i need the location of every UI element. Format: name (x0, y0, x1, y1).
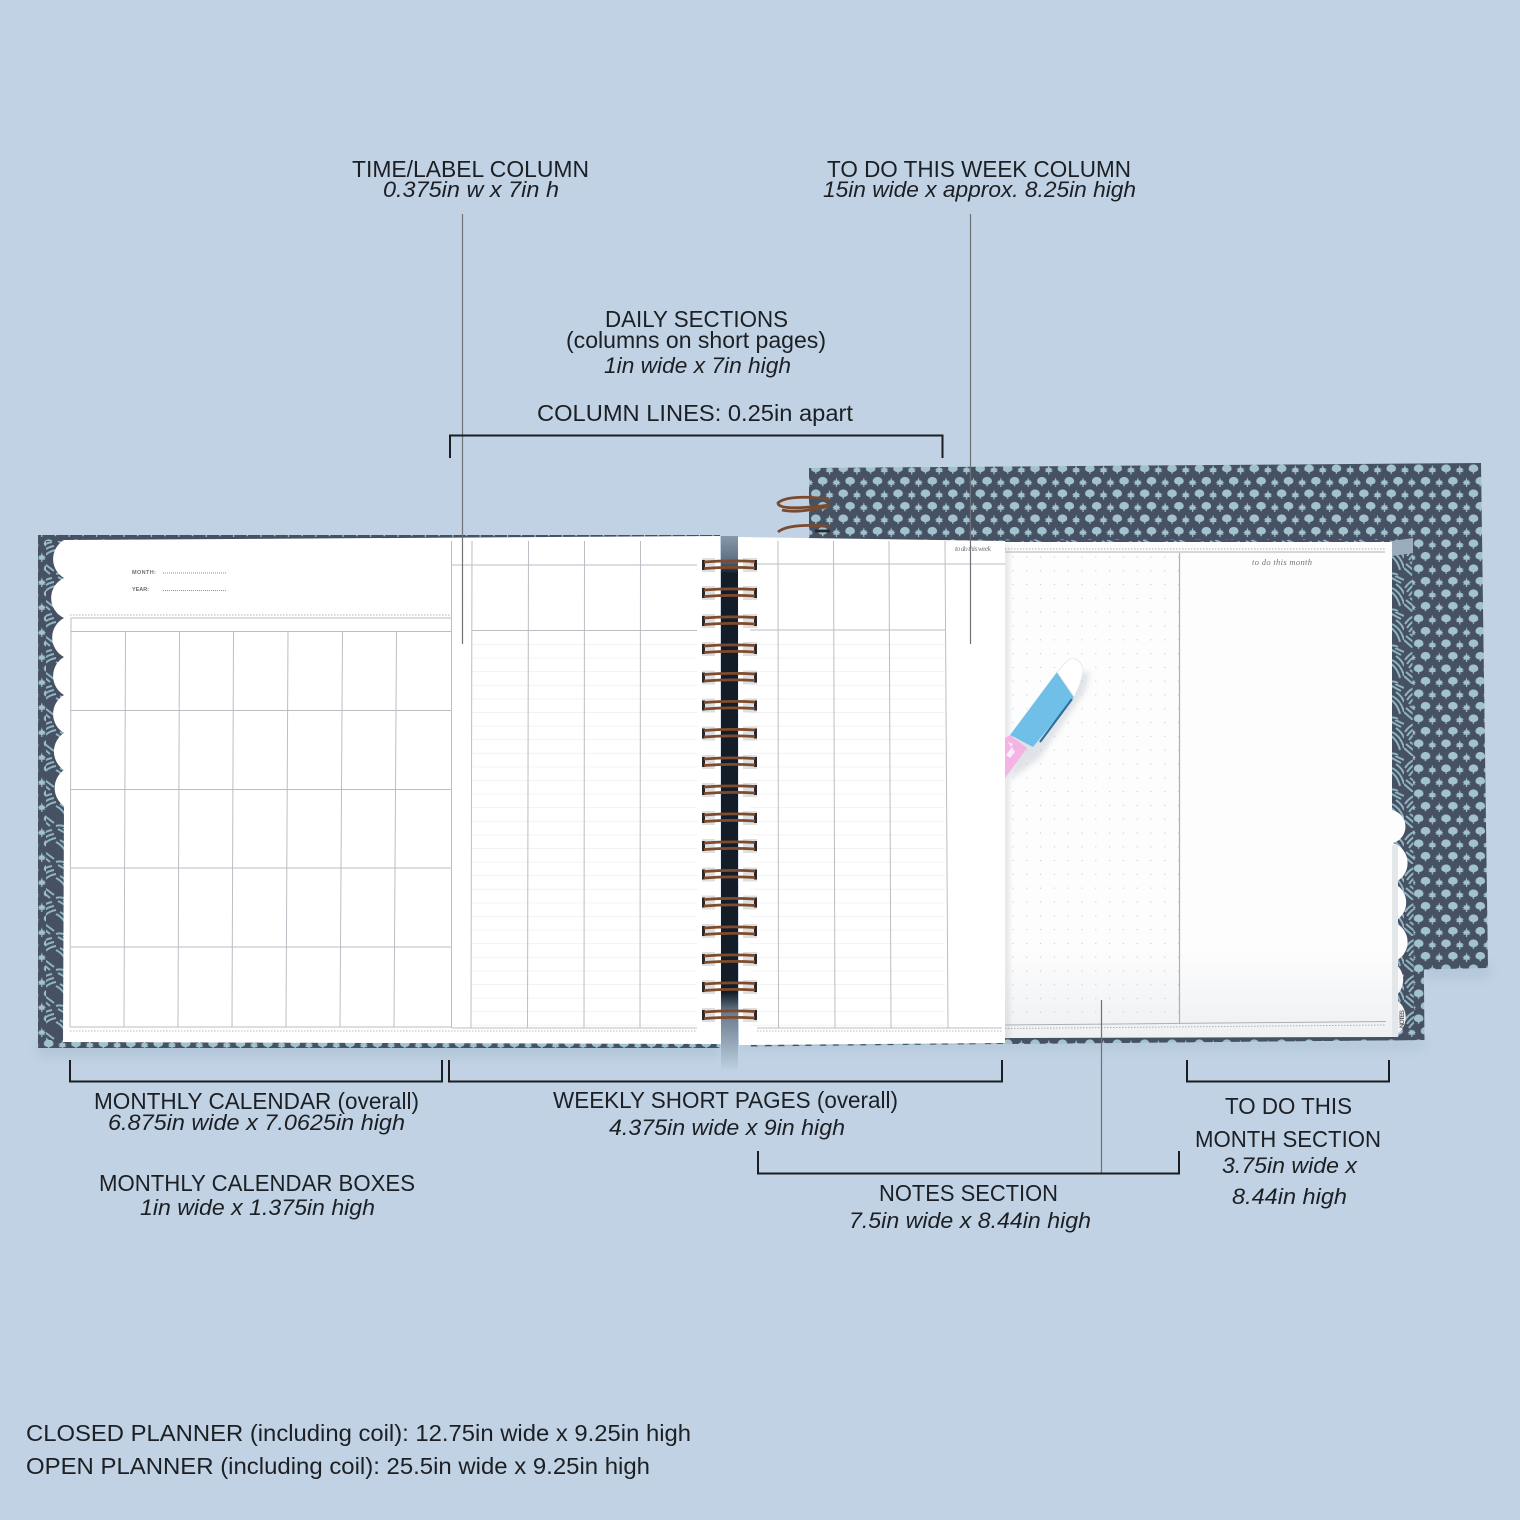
back cover with floral pattern (809, 463, 1488, 970)
year label: YEAR: (132, 587, 149, 593)
pen white cap (1057, 659, 1083, 697)
left page sheet with scallops (51, 536, 721, 1044)
label: time/label column (352, 156, 589, 202)
left cover floral top strip (38, 535, 720, 541)
label: column lines: COLUMN LINES: 0.25in apart (537, 400, 854, 426)
cast shadow (38, 965, 1490, 1056)
to do this week label: to do this week (955, 544, 992, 553)
pen blue clip (1010, 672, 1074, 747)
to do this month label: to do this month (1252, 557, 1312, 567)
grey strip above to-do section (1392, 538, 1413, 556)
month and year fields (132, 570, 226, 593)
label: to do this week column: 15in wide x approx. 8.25in high (823, 177, 1136, 202)
planner photograph (38, 463, 1490, 1070)
right weekly page (738, 537, 1005, 1045)
label: notes section: 7.5in wide x 8.44in high (849, 1208, 1091, 1233)
label: time/label column: TIME/LABEL COLUMN (352, 156, 589, 182)
left weekly grid lines (452, 541, 697, 1028)
monthly calendar grid (70, 618, 452, 1027)
label: weekly short pages: WEEKLY SHORT PAGES (overall) (553, 1087, 898, 1113)
label: daily sections: (columns on short pages) (566, 327, 826, 353)
right weekly dotted foot (757, 1030, 1002, 1032)
field dotted lines (163, 573, 226, 590)
bracket: weekly short pages (449, 1060, 1002, 1082)
label: time/label column: 0.375in w x 7in h (383, 177, 559, 202)
label: monthly calendar boxes (99, 1170, 415, 1220)
notes page rules (1005, 549, 1386, 1028)
left pages (51, 536, 721, 1044)
pen pink barrel (1005, 735, 1027, 778)
tab shading (1392, 845, 1398, 1037)
floral strip below notes page (751, 1030, 1424, 1046)
left weekly ruled lines (472, 644, 697, 1028)
right weekly sheet (738, 537, 1005, 1045)
label: to do this month section: 8.44in high (1232, 1184, 1347, 1209)
label: notes section: NOTES SECTION (879, 1180, 1058, 1206)
label: overall planner dimensions (26, 1420, 691, 1479)
notes page sheet (1000, 542, 1408, 1038)
left dotted foot (70, 1030, 697, 1032)
left cover (38, 535, 720, 1048)
notes tab label: NOTES (1399, 1009, 1406, 1028)
label: notes section (849, 1180, 1091, 1233)
label: monthly calendar overall: MONTHLY CALENDAR (overall) (94, 1088, 419, 1114)
bracket: monthly calendar (70, 1060, 442, 1082)
spiral binding (702, 558, 757, 1022)
label: daily sections (566, 306, 826, 378)
label: to do this month section: TO DO THIS (1225, 1093, 1352, 1119)
label: to do this month section: MONTH SECTION (1195, 1126, 1381, 1152)
pen pink barrel pattern (1006, 742, 1015, 758)
label: to do this week column (823, 156, 1136, 202)
page edge shadow on notes (1003, 545, 1009, 1040)
right weekly ruled lines (750, 644, 945, 1028)
notes dot grid (1006, 553, 1179, 1022)
bracket: notes section (758, 1151, 1179, 1174)
right weekly grid lines (750, 541, 1005, 1028)
label: weekly short pages: 4.375in wide x 9in high (609, 1115, 845, 1140)
label: daily sections: 1in wide x 7in high (604, 353, 791, 378)
pen (1005, 659, 1090, 780)
label: to do this month section (1195, 1093, 1381, 1209)
left cover floral bottom strip (38, 1040, 720, 1048)
pen clip shadow (1040, 699, 1072, 742)
label: overall planner dimensions: OPEN PLANNER (including coil): 25.5in wide x 9.25in high (26, 1453, 650, 1479)
label: weekly short pages (553, 1087, 898, 1140)
leader lines (462, 214, 1102, 1173)
spine (721, 536, 738, 1070)
bracket: column lines (450, 436, 942, 458)
left cover floral edge strip (38, 535, 46, 1048)
middle cover floral edge strip (1412, 539, 1424, 1040)
pen soft shadow (1010, 672, 1090, 780)
label: daily sections: DAILY SECTIONS (605, 306, 788, 332)
notes page (1000, 542, 1408, 1038)
label: monthly calendar overall: 6.875in wide x 7.0625in high (108, 1110, 405, 1135)
label: to do this month section: 3.75in wide x (1222, 1153, 1358, 1178)
back cover coil rings (778, 497, 830, 532)
label: monthly calendar boxes: 1in wide x 1.375in high (140, 1195, 375, 1220)
label: monthly calendar boxes: MONTHLY CALENDAR BOXES (99, 1170, 415, 1196)
bracket: to do this month (1187, 1060, 1389, 1082)
calendar top dotted rule (70, 614, 452, 616)
month label: MONTH: (132, 570, 156, 576)
label: overall planner dimensions: CLOSED PLANNER (including coil): 12.75in wide x 9.25in high (26, 1420, 691, 1446)
label: monthly calendar overall (94, 1088, 419, 1135)
label: to do this week column: TO DO THIS WEEK COLUMN (827, 156, 1131, 182)
middle cover with scale pattern (750, 539, 1424, 1046)
